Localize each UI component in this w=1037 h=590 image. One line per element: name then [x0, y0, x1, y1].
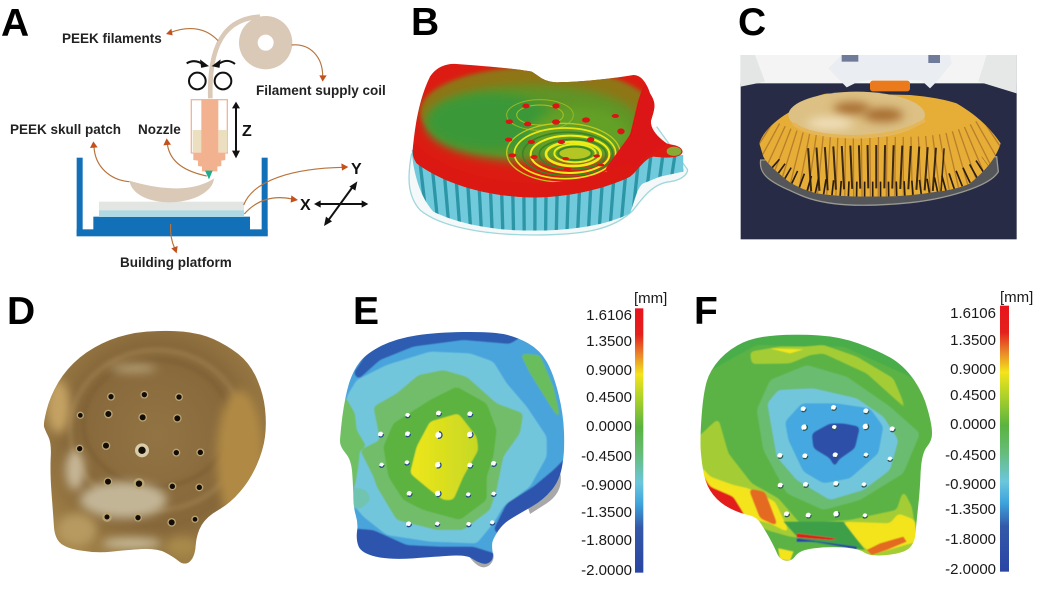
panel C: printed part photo	[738, 1, 1017, 239]
colour bar labels: -0.9000	[945, 476, 996, 493]
colour bar labels: -0.4500	[945, 447, 996, 464]
colour bar labels: 1.3500	[950, 332, 996, 349]
heading B: B	[411, 1, 439, 44]
fins	[759, 93, 1000, 197]
panel B: slicing preview	[408, 8, 688, 236]
colour bar labels: -1.3500	[581, 504, 632, 521]
colour bar labels: 1.6106	[950, 305, 996, 322]
colour bar labels: [mm]	[1000, 289, 1033, 306]
contour rings	[507, 100, 620, 182]
contour map	[340, 332, 564, 564]
label: Y: Y	[351, 161, 362, 178]
rollers	[187, 61, 235, 89]
colour bar labels	[581, 290, 667, 579]
raft	[760, 157, 998, 205]
colour bar labels: -0.4500	[581, 448, 632, 465]
colour bar	[1000, 306, 1009, 572]
support fins	[412, 150, 684, 231]
colour bar labels	[945, 289, 1033, 578]
rivet holes	[378, 411, 496, 527]
label: X: X	[300, 197, 311, 214]
heading C: C	[738, 1, 766, 44]
label: Filament supply coil: Filament supply coil	[256, 83, 386, 98]
panel A: printer schematic	[1, 2, 386, 270]
colour bar labels: -1.8000	[581, 532, 632, 549]
XY axes	[314, 181, 368, 226]
panel E: deviation map	[330, 290, 667, 579]
colour bar labels: 1.3500	[586, 333, 632, 350]
heading F: F	[694, 290, 718, 333]
label: PEEK filaments: PEEK filaments	[62, 31, 162, 46]
print head	[828, 55, 952, 91]
panel F: deviation map	[690, 289, 1033, 578]
colour bar labels: -1.8000	[945, 531, 996, 548]
heading A: A	[1, 2, 29, 45]
label: Building platform: Building platform	[120, 255, 232, 270]
dome	[788, 92, 925, 138]
colour bar labels: 0.0000	[586, 418, 632, 435]
grey backing	[467, 472, 561, 567]
colour bar labels: 1.6106	[586, 307, 632, 324]
skull patch	[129, 178, 214, 202]
label: Z: Z	[242, 123, 252, 140]
patch body	[40, 327, 273, 570]
colour bar labels: 0.4500	[950, 387, 996, 404]
callout arrows	[90, 29, 348, 253]
contour map	[700, 334, 932, 561]
colour bar labels: -2.0000	[581, 562, 632, 579]
colour bar labels: 0.4500	[586, 389, 632, 406]
colour bar labels: 0.9000	[950, 361, 996, 378]
raft outline	[409, 127, 688, 235]
heading E: E	[353, 290, 379, 333]
colour bar labels: 0.0000	[950, 416, 996, 433]
colour bar labels: -2.0000	[945, 561, 996, 578]
heading D: D	[7, 290, 35, 333]
colour bar labels: 0.9000	[586, 362, 632, 379]
printed top surface	[412, 64, 683, 198]
rivet holes	[777, 405, 895, 518]
colour bar labels: [mm]	[634, 290, 667, 307]
label: PEEK skull patch: PEEK skull patch	[10, 122, 121, 137]
colour bar labels: -0.9000	[581, 477, 632, 494]
screw holes	[505, 103, 625, 171]
colour bar labels: -1.3500	[945, 501, 996, 518]
tank and building platform	[77, 158, 268, 236]
nozzle	[191, 100, 227, 179]
filament and supply coil	[210, 16, 292, 98]
colour bar	[635, 308, 643, 573]
photo background	[741, 55, 1017, 239]
panel D: finished skull patch photo	[7, 290, 273, 570]
rivet holes	[76, 391, 204, 526]
Z arrow	[232, 102, 240, 158]
label: Nozzle: Nozzle	[138, 122, 181, 137]
